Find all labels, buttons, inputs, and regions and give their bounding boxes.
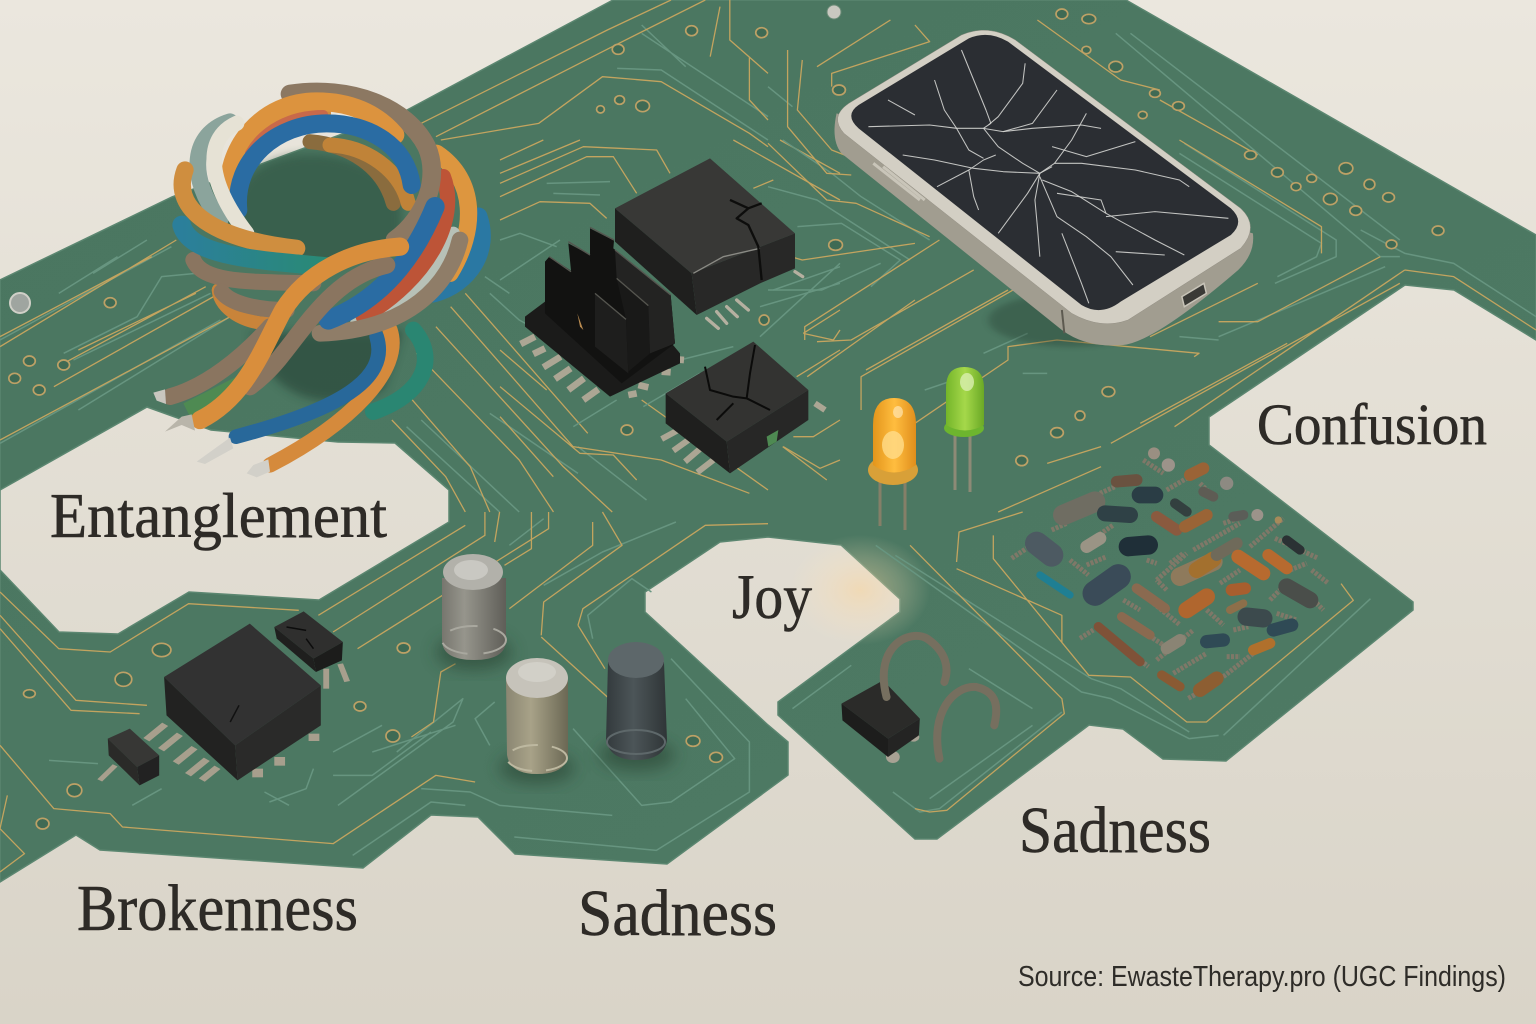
label: Joy: Joy (732, 561, 812, 632)
icon: capacitor (grey) (436, 554, 512, 670)
icon: broken chip with small parts (97, 611, 350, 785)
via: silver top hole (827, 5, 841, 19)
label: Confusion: Confusion (1257, 392, 1487, 457)
icon: resistor cluster (1012, 447, 1328, 698)
icon: tangled wires (153, 92, 482, 477)
label: Sadness (capacitors): Sadness (578, 877, 777, 950)
icon: capacitor (tan) (499, 658, 575, 784)
icon: capacitor (dark) (599, 642, 675, 771)
label: Entanglement: Entanglement (50, 480, 387, 551)
icon: cracked black chip (top) (615, 158, 803, 328)
label: Sadness (cube): Sadness (1019, 794, 1211, 867)
icon: green LED (944, 367, 984, 492)
icon: cracked smartphone (834, 30, 1253, 347)
icon: black cube with bent wires (841, 636, 996, 763)
icon: orange LED (868, 398, 918, 530)
label: Brokenness: Brokenness (77, 872, 358, 945)
icon: cracked black chip (middle) (662, 342, 825, 473)
via: silver left hole (10, 293, 30, 313)
icon: black heat sink (521, 227, 684, 400)
